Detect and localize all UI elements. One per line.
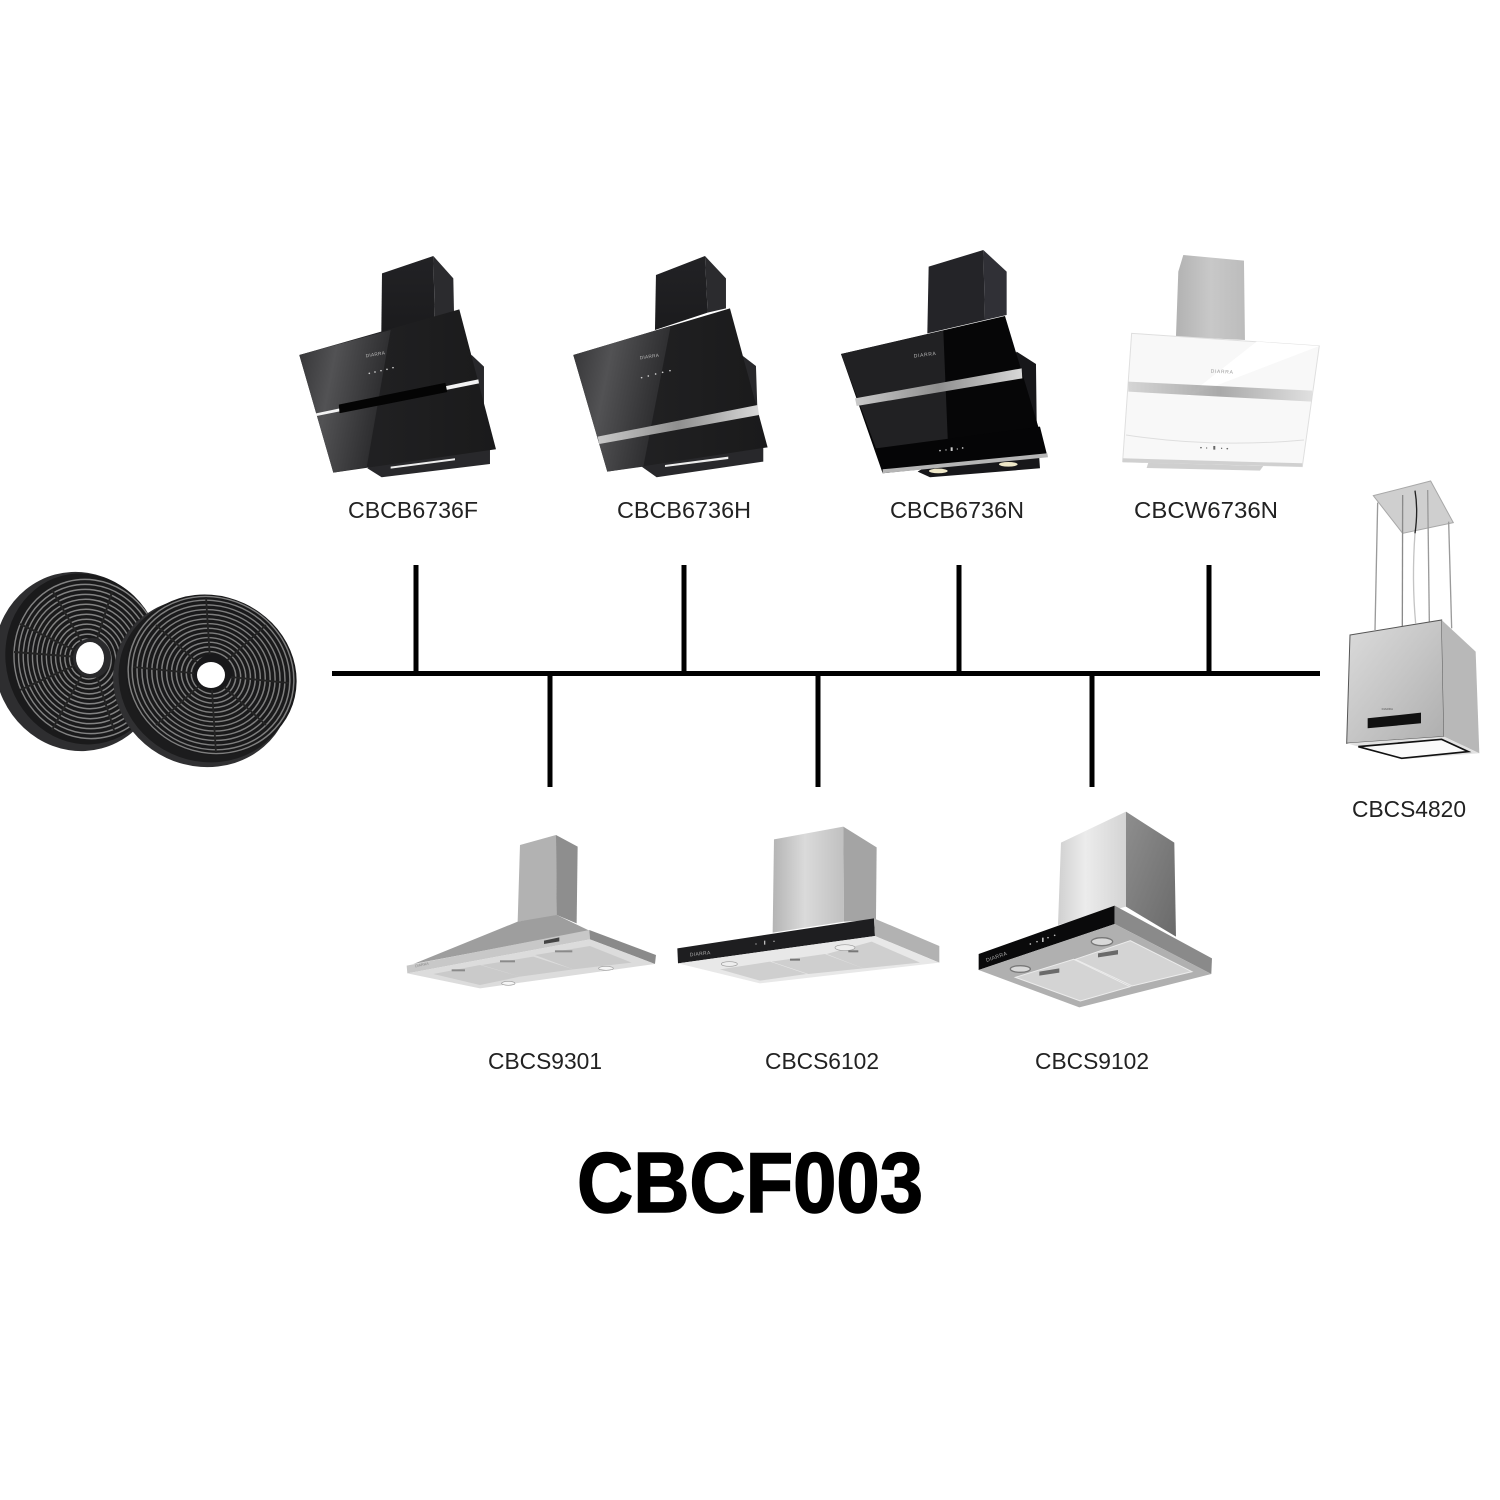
product: hood CBCW6736N	[1123, 255, 1319, 471]
product: hood CBCB6736F	[299, 256, 496, 477]
label: CBCB6736N: CBCB6736N	[890, 497, 1024, 523]
title: CBCF003	[577, 1136, 923, 1231]
product: hood CBCB6736H: DIARRA	[639, 353, 660, 360]
product: hood CBCS9301: DIARRA	[415, 962, 430, 968]
product: hood CBCS9301	[407, 835, 656, 988]
label: CBCW6736N: CBCW6736N	[1134, 497, 1278, 523]
label: CBCB6736F: CBCB6736F	[348, 497, 478, 523]
label: CBCB6736H: CBCB6736H	[617, 497, 751, 523]
label: CBCS9301: CBCS9301	[488, 1048, 602, 1074]
product: hood CBCS9102	[979, 812, 1212, 1007]
icon: carbon filter right	[85, 567, 323, 796]
connector lines	[332, 565, 1320, 787]
product: island hood CBCS4820	[1347, 481, 1479, 759]
product: hood CBCB6736H	[573, 256, 768, 477]
product: hood CBCB6736F: DIARRA	[365, 350, 386, 358]
label: CBCS9102: CBCS9102	[1035, 1048, 1149, 1074]
product: hood CBCS6102: DIARRA	[690, 950, 711, 958]
label: CBCS4820: CBCS4820	[1352, 796, 1466, 822]
product: hood CBCW6736N: DIARRA	[1211, 369, 1234, 376]
product: hood CBCB6736N: DIARRA	[914, 351, 937, 360]
product: hood CBCB6736N	[841, 250, 1048, 477]
product: hood CBCS6102	[677, 827, 939, 983]
product: hood CBCS9102: DIARRA	[985, 951, 1008, 964]
product: island hood CBCS4820: DIARRA	[1382, 707, 1393, 711]
icon: carbon filter left	[0, 553, 183, 770]
label: CBCS6102: CBCS6102	[765, 1048, 879, 1074]
